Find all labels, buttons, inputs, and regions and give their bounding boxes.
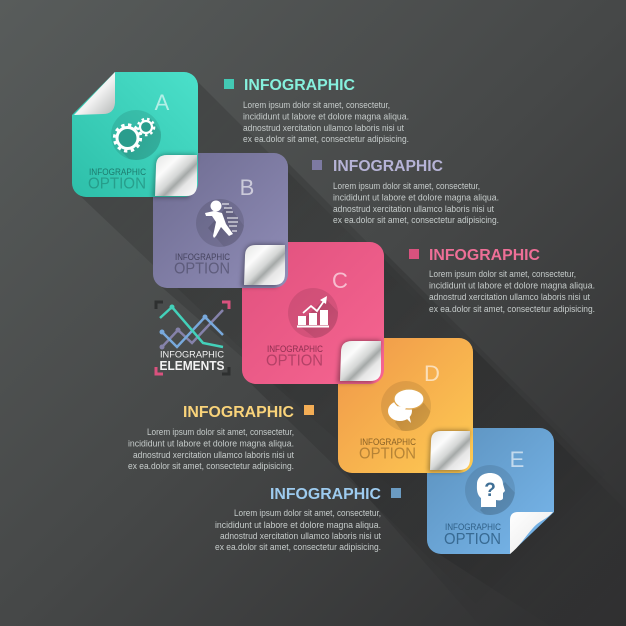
letter E: E — [510, 447, 524, 472]
logo dots — [160, 304, 208, 350]
text block: C: Lorem ipsum dolor sit amet, consectetur, — [429, 269, 576, 279]
logo text: INFOGRAPHIC — [160, 350, 224, 360]
label A: INFOGRAPHIC — [89, 167, 146, 177]
letter D: D — [424, 361, 440, 386]
curl B shadow — [241, 244, 285, 287]
text block: C: incididunt ut labore et dolore magna aliqua. — [429, 280, 595, 290]
fold A — [74, 72, 115, 115]
heading: D: INFOGRAPHIC — [183, 404, 294, 421]
text block: C: ex ea.dolor sit amet, consectetur adipisicing. — [429, 304, 595, 314]
logo text: ELEMENTS — [160, 359, 224, 373]
letter B: B — [240, 175, 254, 200]
text block: D — [128, 427, 295, 471]
curl A surface — [155, 155, 197, 196]
icon circle: head with question mark: ? — [484, 480, 496, 501]
text block: B: adnostrud xercitation ullamco laboris nisi ut — [333, 204, 495, 214]
logo corners — [156, 302, 229, 374]
text block: E: Lorem ipsum dolor sit amet, consectetur, — [234, 508, 381, 518]
label D: OPTION — [359, 446, 416, 462]
label E — [444, 522, 501, 548]
heading: C: INFOGRAPHIC — [429, 247, 540, 264]
label B: INFOGRAPHIC — [175, 252, 230, 262]
label A — [88, 167, 146, 192]
text block: E: ex ea.dolor sit amet, consectetur adipisicing. — [215, 542, 381, 552]
text block: E: adnostrud xercitation ullamco laboris nisi ut — [220, 531, 382, 541]
panel: card E — [427, 428, 554, 554]
logo: infographic elements — [156, 302, 229, 374]
text block: D: Lorem ipsum dolor sit amet, consectetur, — [147, 427, 294, 437]
letter A: A — [155, 90, 170, 115]
icon circle: growth chart — [288, 288, 338, 338]
letter C: C — [332, 268, 348, 293]
text block: B: ex ea.dolor sit amet, consectetur adipisicing. — [333, 215, 499, 225]
curl C shadow — [337, 340, 381, 383]
curl E — [510, 512, 553, 554]
icon circle: gears — [111, 110, 161, 160]
label E: OPTION — [444, 531, 501, 548]
label B: OPTION — [174, 260, 230, 278]
text block: E: incididunt ut labore et dolore magna aliqua. — [215, 520, 381, 530]
label A: OPTION — [88, 176, 146, 192]
heading: A: INFOGRAPHIC — [244, 77, 355, 94]
text block: A: ex ea.dolor sit amet, consectetur adipisicing. — [243, 134, 409, 144]
text block: B: Lorem ipsum dolor sit amet, consectetur, — [333, 181, 480, 191]
label C: INFOGRAPHIC — [267, 344, 323, 354]
curl C surface — [340, 341, 381, 381]
label E: INFOGRAPHIC — [445, 522, 501, 532]
text block: D: adnostrud xercitation ullamco laboris nisi ut — [133, 450, 295, 460]
panel: card A — [72, 72, 198, 198]
label C — [266, 344, 323, 370]
label D: INFOGRAPHIC — [360, 437, 416, 447]
icon circle: speech bubbles — [381, 381, 431, 431]
heading: B: INFOGRAPHIC — [333, 158, 443, 175]
heading: E: INFOGRAPHIC — [270, 486, 381, 503]
logo chart lines — [160, 307, 223, 347]
text block: A: adnostrud xercitation ullamco laboris nisi ut — [243, 123, 405, 133]
text block: C — [429, 269, 595, 314]
text block: D: incididunt ut labore et dolore magna aliqua. — [128, 438, 294, 448]
text block: D: ex ea.dolor sit amet, consectetur adipisicing. — [128, 461, 294, 471]
curl A shadow — [152, 154, 197, 198]
logo text — [160, 350, 224, 373]
label C: OPTION — [266, 352, 323, 370]
text block: A: incididunt ut labore et dolore magna aliqua. — [243, 112, 409, 122]
panel: card B — [153, 153, 288, 288]
label B — [174, 252, 230, 278]
panel: card D — [338, 338, 473, 473]
curl D shadow — [428, 430, 470, 472]
text block: A: Lorem ipsum dolor sit amet, consectetur, — [243, 100, 390, 110]
text block: B: incididunt ut labore et dolore magna aliqua. — [333, 192, 499, 202]
text block: C: adnostrud xercitation ullamco laboris nisi ut — [429, 292, 591, 302]
text block: E — [215, 508, 382, 552]
long shadows of the cards — [76, 74, 626, 626]
curl D surface — [430, 431, 470, 470]
text block: B — [333, 181, 499, 225]
curl B surface — [244, 245, 285, 285]
label D — [359, 437, 416, 462]
icon circle: running man — [196, 199, 244, 247]
panel: card C — [242, 242, 384, 384]
text block: A — [243, 100, 409, 144]
